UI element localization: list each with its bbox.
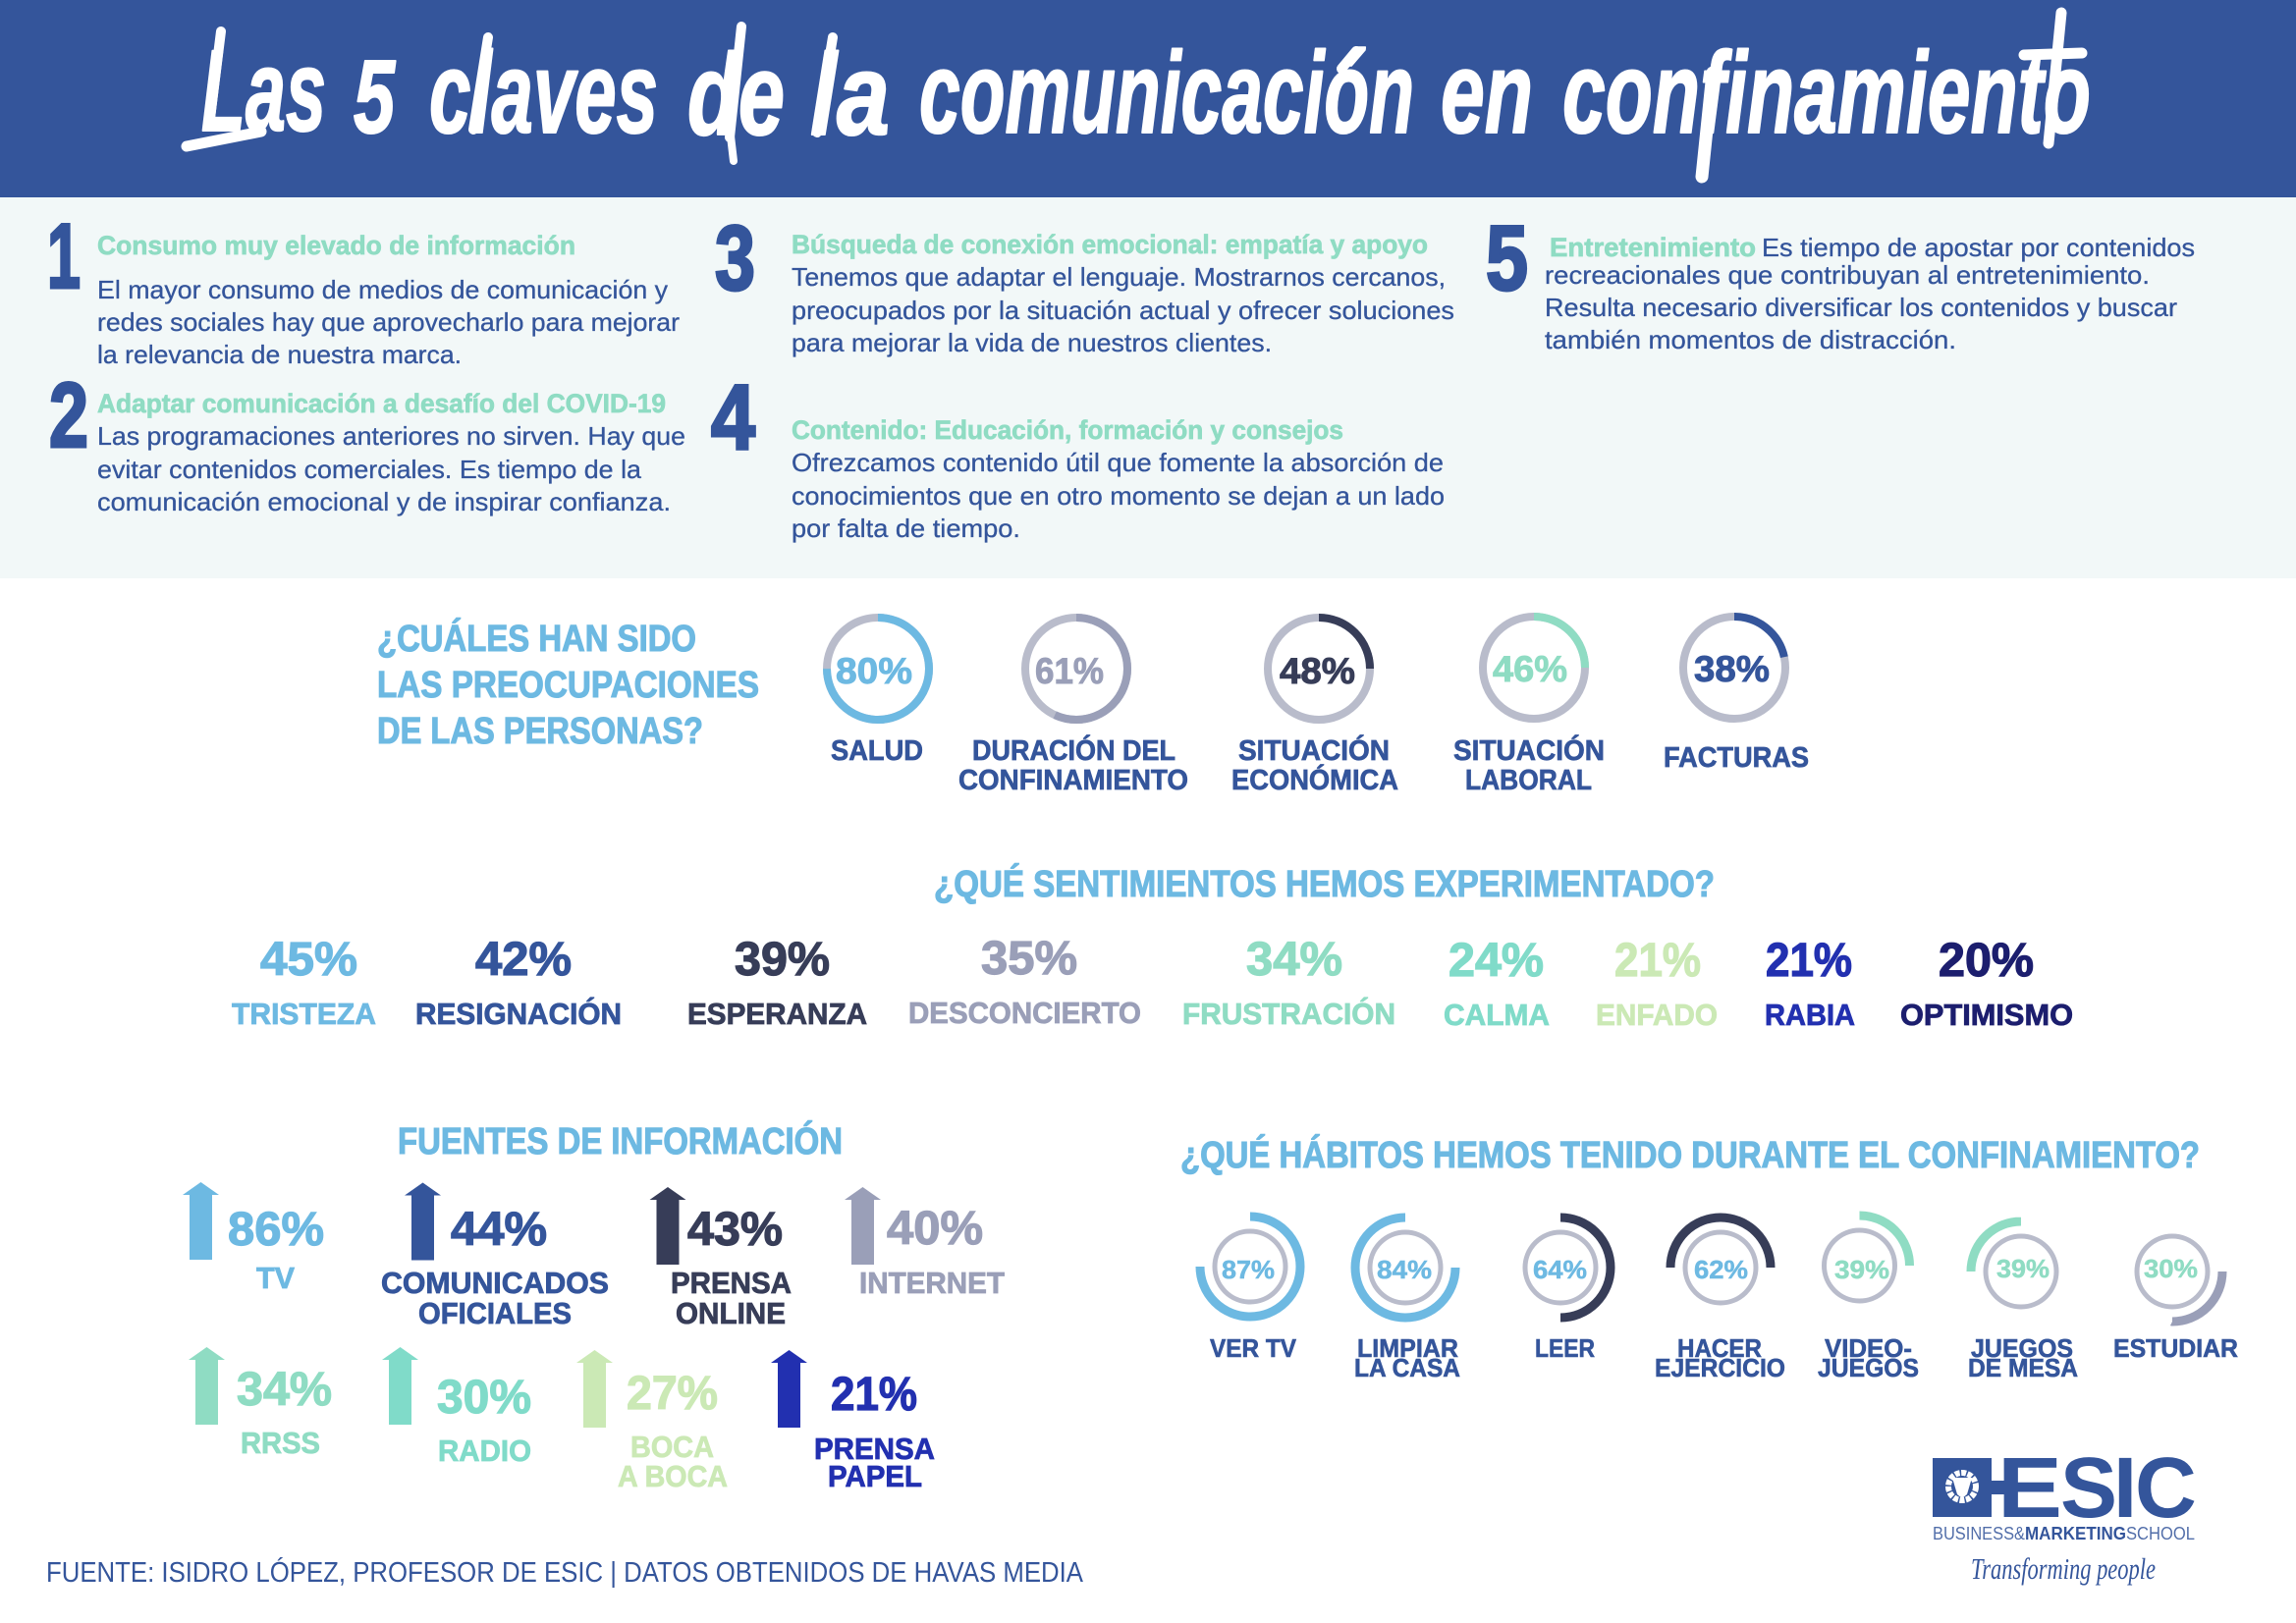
- sentimientos row: [232, 933, 2073, 1032]
- donut chart: salud 80%: [827, 618, 929, 767]
- hábitos: hacer ejercicio 62%: HACER: [1677, 1333, 1762, 1363]
- clave 4: Ofrezcamos contenido útil que fomente la absorción de: [792, 448, 1444, 477]
- clave 3: para mejorar la vida de nuestros clientes.: [792, 328, 1272, 357]
- title: 5: [354, 39, 396, 155]
- title: de: [687, 30, 785, 160]
- enfado: ENFADO: [1596, 998, 1718, 1032]
- donut chart: situación laboral 46%: 46%: [1493, 649, 1567, 689]
- fuente: boca a boca: BOCA: [630, 1430, 714, 1464]
- donut chart: situación económica 48%: SITUACIÓN: [1238, 733, 1390, 767]
- hábitos: videojuegos 39%: [1809, 1216, 1919, 1382]
- source footer: FUENTE: ISIDRO LÓPEZ, PROFESOR DE ESIC | DATOS OBTENIDOS DE HAVAS MEDIA: [46, 1556, 1084, 1589]
- logo: ESIC: Transforming people: [1971, 1551, 2156, 1586]
- clave 2: 2: [49, 363, 88, 466]
- calma: [1444, 935, 1550, 1032]
- hábitos: estudiar 30%: ESTUDIAR: [2113, 1333, 2238, 1363]
- clave 5: [1486, 206, 2195, 354]
- clave 1: [47, 204, 680, 369]
- hábitos: estudiar 30%: [2113, 1221, 2238, 1363]
- donut chart: situación laboral 46%: [1453, 617, 1605, 796]
- clave 4: por falta de tiempo.: [792, 514, 1020, 543]
- esperanza: 39%: [735, 934, 830, 986]
- hábitos: hacer ejercicio 62%: [1655, 1217, 1785, 1382]
- donut chart: facturas 38%: [1664, 617, 1809, 774]
- heading: fuentes de información: FUENTES DE INFORMACIÓN: [398, 1119, 843, 1163]
- frustración: 34%: [1246, 934, 1342, 986]
- hábitos: leer 64%: [1510, 1217, 1611, 1363]
- title: [187, 13, 2091, 177]
- calma: CALMA: [1444, 998, 1550, 1032]
- header band: [0, 0, 2296, 197]
- donut chart: duración 61%: 61%: [1035, 651, 1104, 691]
- title: claves: [429, 28, 658, 158]
- donut chart: situación económica 48%: [1231, 618, 1398, 796]
- clave 1: redes sociales hay que aprovecharlo para mejorar: [97, 307, 680, 337]
- tristeza: TRISTEZA: [232, 997, 376, 1031]
- rabia: 21%: [1766, 935, 1852, 987]
- enfado: [1596, 935, 1718, 1032]
- fuente: TV: 86%: [228, 1204, 324, 1256]
- hábitos: ver TV 87%: VER TV: [1210, 1333, 1297, 1363]
- clave 5: 5: [1486, 206, 1528, 309]
- title: comunicación: [919, 28, 1414, 158]
- donut chart: facturas 38%: 38%: [1694, 649, 1770, 689]
- hábitos: ver TV 87%: 87%: [1222, 1255, 1275, 1284]
- hábitos: limpiar la casa 84%: LA CASA: [1354, 1353, 1460, 1382]
- fuente: comunicados oficiales: [381, 1182, 609, 1330]
- clave 2: evitar contenidos comerciales. Es tiempo de la: [97, 455, 642, 484]
- clave 1: la relevancia de nuestra marca.: [97, 340, 462, 369]
- donut chart: duración 61%: DURACIÓN DEL: [972, 733, 1175, 767]
- fuente: prensa papel: 21%: [831, 1369, 917, 1421]
- fuente: internet: 40%: [887, 1203, 983, 1255]
- hábitos: juegos de mesa 39%: [1968, 1221, 2078, 1382]
- heading: preocupaciones: [377, 617, 759, 752]
- clave 1: El mayor consumo de medios de comunicación y: [97, 275, 668, 304]
- donut chart: facturas 38%: FACTURAS: [1664, 742, 1809, 774]
- resignación: RESIGNACIÓN: [415, 996, 622, 1031]
- tristeza: 45%: [260, 934, 357, 986]
- resignación: [415, 934, 622, 1031]
- heading: preocupaciones: ¿CUÁLES HAN SIDO: [377, 617, 696, 660]
- hábitos: leer 64%: LEER: [1535, 1333, 1595, 1363]
- hábitos: ver TV 87%: [1200, 1217, 1300, 1363]
- logo: ESIC: SIC: [2060, 1440, 2197, 1536]
- title: Las: [201, 27, 326, 156]
- hábitos: leer 64%: 64%: [1533, 1255, 1587, 1284]
- clave 1: Consumo muy elevado de información: [97, 231, 575, 260]
- optimismo: [1900, 935, 2073, 1032]
- title: en: [1441, 28, 1533, 158]
- donut chart: salud 80%: 80%: [836, 651, 912, 691]
- donut chart: situación económica 48%: 48%: [1280, 651, 1355, 691]
- fuente: prensa online: 43%: [687, 1204, 783, 1256]
- donut chart: salud 80%: SALUD: [831, 735, 923, 767]
- desconcierto: DESCONCIERTO: [908, 996, 1141, 1030]
- enfado: 21%: [1614, 935, 1701, 987]
- clave 5: recreacionales que contribuyan al entretenimiento.: [1545, 260, 2150, 290]
- fuente: prensa papel: PRENSA: [814, 1432, 935, 1466]
- fuente: prensa papel: [771, 1350, 935, 1493]
- fuente: boca a boca: A BOCA: [618, 1459, 728, 1493]
- hábitos: limpiar la casa 84%: 84%: [1377, 1255, 1432, 1284]
- clave 4: Contenido: Educación, formación y consejos: [792, 415, 1343, 445]
- clave 5: Resulta necesario diversificar los contenidos y buscar: [1545, 293, 2177, 322]
- clave 3: preocupados por la situación actual y ofrecer soluciones: [792, 296, 1454, 325]
- logo: ESIC: E: [1997, 1440, 2062, 1536]
- title: la: [810, 30, 890, 160]
- desconcierto: [908, 933, 1141, 1030]
- logo: ESIC: BUSINESS&: [1933, 1524, 2025, 1543]
- rabia: RABIA: [1765, 998, 1855, 1032]
- donut chart: duración 61%: [958, 618, 1188, 796]
- clave 3: 3: [715, 206, 755, 309]
- optimismo: 20%: [1939, 935, 2034, 987]
- rabia: [1765, 935, 1855, 1032]
- frustración: FRUSTRACIÓN: [1182, 996, 1395, 1031]
- fuente: TV: TV: [256, 1261, 295, 1295]
- fuente: radio: 30%: [437, 1372, 531, 1424]
- heading: preocupaciones: LAS PREOCUPACIONES: [377, 665, 759, 706]
- clave 3: Tenemos que adaptar el lenguaje. Mostrarnos cercanos,: [792, 262, 1446, 292]
- resignación: 42%: [475, 934, 572, 986]
- frustración: [1182, 934, 1395, 1031]
- fuente: boca a boca: [576, 1350, 728, 1493]
- tristeza: [232, 934, 376, 1031]
- hábitos: hacer ejercicio 62%: 62%: [1694, 1255, 1748, 1284]
- fuente: comunicados oficiales: 44%: [451, 1204, 547, 1256]
- fuente: prensa online: PRENSA: [671, 1266, 792, 1300]
- clave 4: [711, 365, 1445, 543]
- fuente: RRSS: 34%: [237, 1364, 332, 1416]
- hábitos: videojuegos 39%: VIDEO-: [1825, 1333, 1912, 1363]
- clave 1: 1: [47, 204, 81, 307]
- clave 5: Entretenimiento: [1550, 233, 1756, 262]
- heading: preocupaciones: DE LAS PERSONAS?: [377, 711, 703, 752]
- fuente: comunicados oficiales: OFICIALES: [418, 1296, 572, 1330]
- hábitos: juegos de mesa 39%: JUEGOS: [1971, 1333, 2073, 1363]
- clave 5: también momentos de distracción.: [1545, 325, 1956, 354]
- logo: ESIC: SCHOOL: [2126, 1524, 2195, 1543]
- clave 3: [715, 206, 1454, 357]
- clave 2: Adaptar comunicación a desafío del COVID-19: [97, 389, 666, 418]
- donut chart: situación laboral 46%: SITUACIÓN: [1453, 733, 1605, 767]
- logo: ESIC: [1933, 1440, 2197, 1586]
- hábitos: limpiar la casa 84%: LIMPIAR: [1357, 1333, 1458, 1363]
- fuente: prensa online: [650, 1187, 792, 1330]
- clave 2: Las programaciones anteriores no sirven. Hay que: [97, 421, 685, 451]
- calma: 24%: [1449, 935, 1544, 987]
- donut chart: situación económica 48%: ECONÓMICA: [1231, 763, 1398, 796]
- hábitos: videojuegos 39%: 39%: [1834, 1255, 1889, 1284]
- logo: ESIC: MARKETING: [2025, 1524, 2126, 1543]
- fuente: internet: [845, 1187, 1005, 1300]
- icon: emblem square: [1933, 1458, 2011, 1517]
- fuente: prensa online: ONLINE: [676, 1296, 786, 1330]
- fuente: internet: INTERNET: [859, 1266, 1005, 1300]
- fuente: RRSS: RRSS: [241, 1426, 320, 1460]
- hábitos: videojuegos 39%: JUEGOS: [1818, 1353, 1919, 1382]
- fuente: prensa papel: PAPEL: [828, 1459, 922, 1493]
- donut chart: situación laboral 46%: LABORAL: [1465, 765, 1592, 796]
- fuente: comunicados oficiales: COMUNICADOS: [381, 1266, 609, 1300]
- fuentes de información chart: [183, 1182, 1005, 1493]
- optimismo: OPTIMISMO: [1900, 998, 2073, 1032]
- heading: sentimientos: ¿QUÉ SENTIMIENTOS HEMOS EXPERIMENTADO?: [934, 862, 1715, 905]
- fuente: radio: RADIO: [438, 1434, 531, 1468]
- fuente: RRSS: [189, 1347, 332, 1460]
- panel: las 5 claves: [0, 197, 2296, 578]
- hábitos: juegos de mesa 39%: DE MESA: [1968, 1353, 2078, 1382]
- esperanza: [687, 934, 867, 1031]
- fuente: boca a boca: 27%: [627, 1368, 718, 1420]
- hábitos: juegos de mesa 39%: 39%: [1996, 1254, 2050, 1283]
- fuente: radio: [382, 1347, 531, 1468]
- hábitos: estudiar 30%: 30%: [2144, 1254, 2198, 1283]
- fuente: TV: [183, 1182, 324, 1295]
- hábitos: limpiar la casa 84%: [1354, 1217, 1460, 1382]
- clave 4: conocimientos que en otro momento se dejan a un lado: [792, 481, 1445, 511]
- donut chart: duración 61%: CONFINAMIENTO: [958, 765, 1188, 796]
- clave 5: Es tiempo de apostar por contenidos: [1762, 233, 2195, 262]
- hábitos: hacer ejercicio 62%: EJERCICIO: [1655, 1353, 1785, 1382]
- clave 4: 4: [711, 365, 755, 468]
- clave 2: [49, 363, 685, 516]
- esperanza: ESPERANZA: [687, 997, 867, 1031]
- clave 2: comunicación emocional y de inspirar confianza.: [97, 487, 671, 516]
- desconcierto: 35%: [981, 933, 1077, 985]
- clave 3: Búsqueda de conexión emocional: empatía y apoyo: [792, 230, 1428, 259]
